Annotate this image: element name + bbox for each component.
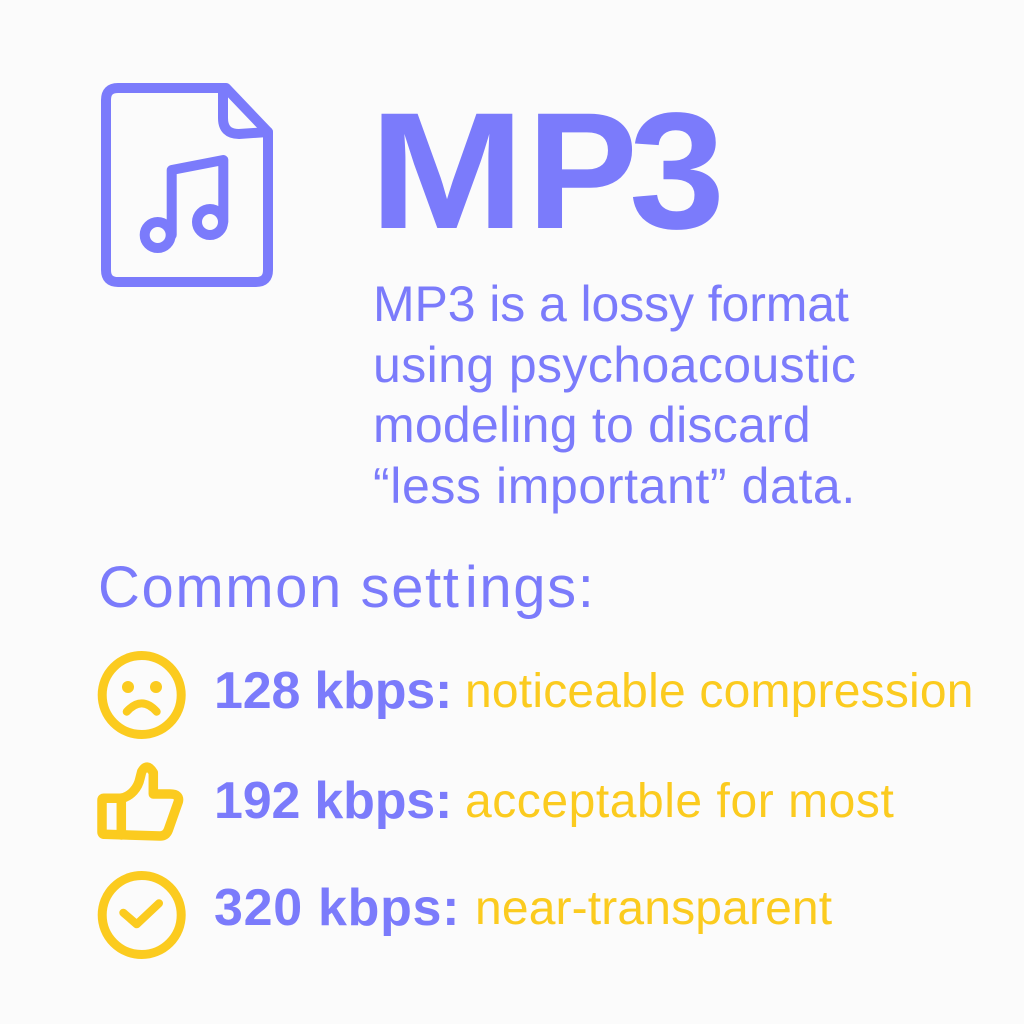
icon: music file: [101, 83, 273, 287]
title: P: [527, 79, 638, 264]
title: [368, 79, 725, 264]
icon: check circle: [98, 871, 186, 959]
title: 3: [629, 79, 725, 264]
description text: using psychoacoustic: [373, 336, 856, 392]
description: near-transparent: near-transparent: [475, 882, 832, 935]
icon: sad face: [98, 651, 186, 739]
heading: common settings: Common settings:: [98, 555, 595, 620]
label: 128 kbps: 128 kbps:: [214, 662, 452, 720]
description text: MP3 is a lossy format: [373, 276, 849, 332]
description text: “less important” data.: [373, 458, 856, 514]
title: M: [368, 79, 524, 264]
description text: modeling to discard: [373, 397, 811, 453]
description text: [373, 276, 856, 514]
label: 320 kbps: 320 kbps:: [214, 879, 460, 937]
description: noticeable compression: noticeable compression: [465, 665, 974, 718]
description: acceptable for most: acceptable for most: [465, 775, 894, 828]
label: 192 kbps: 192 kbps:: [214, 772, 452, 830]
icon: thumbs up: [97, 762, 184, 841]
